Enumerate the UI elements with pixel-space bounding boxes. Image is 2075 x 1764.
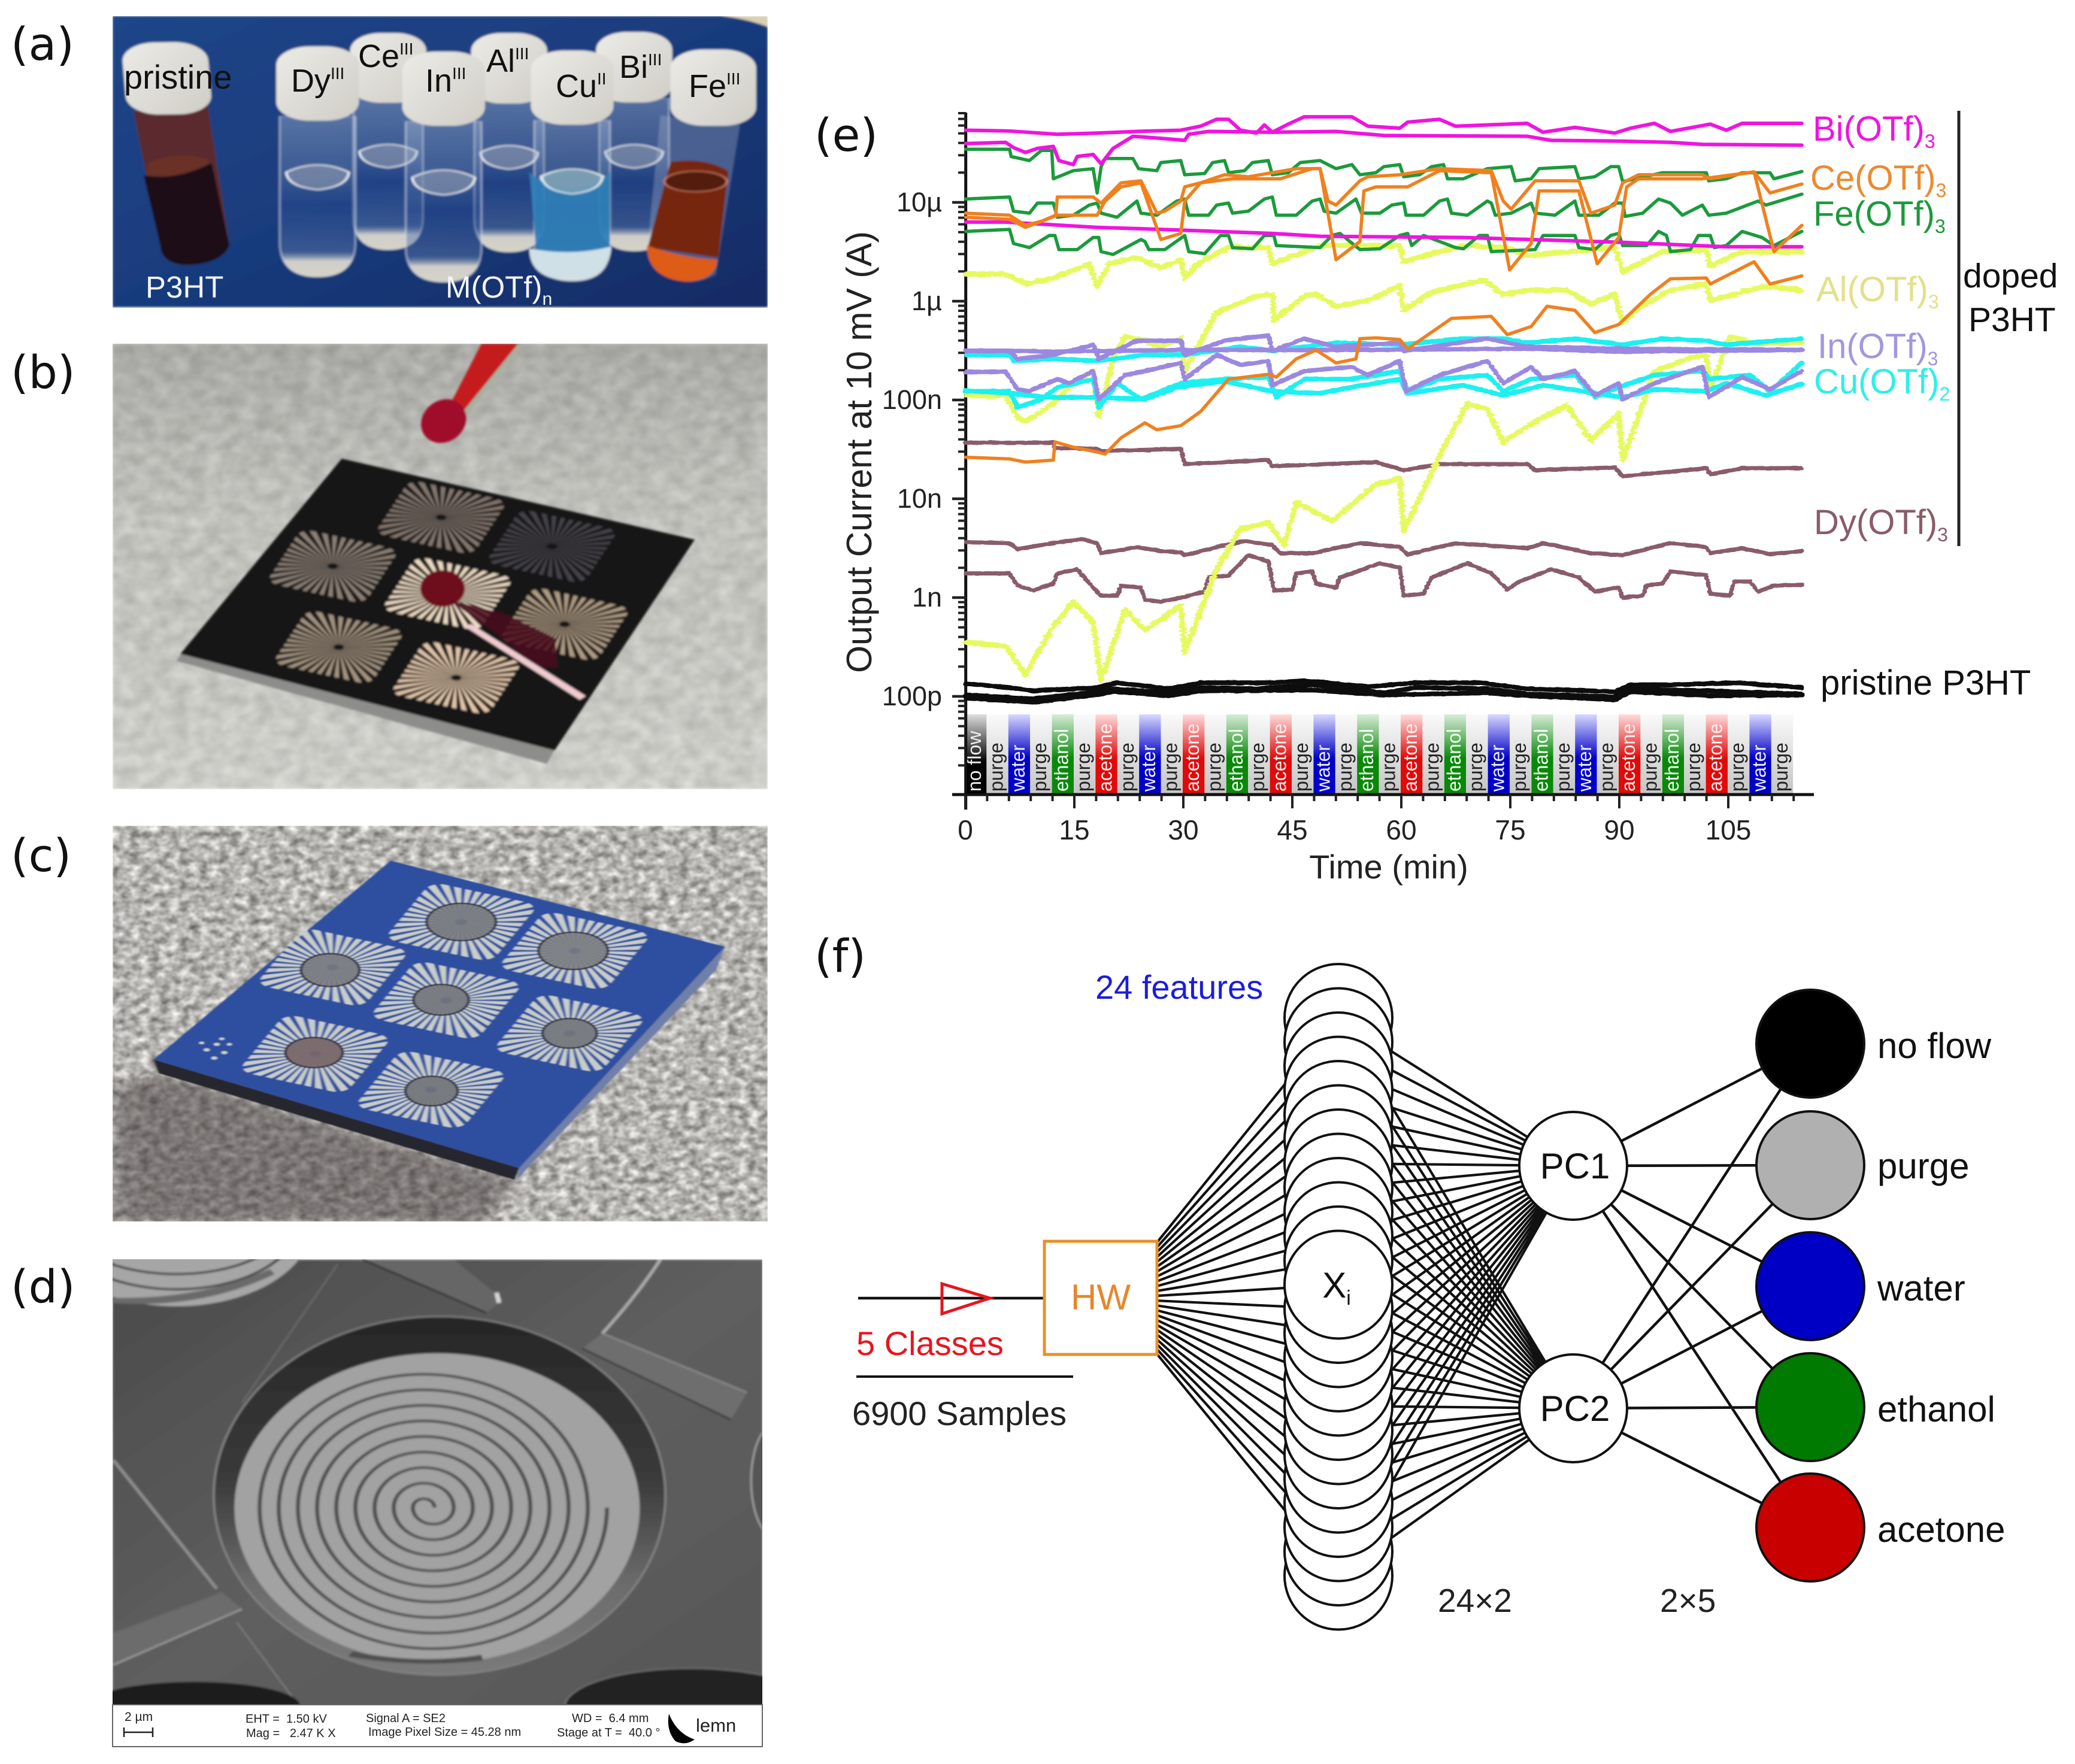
gas stimulus bars: acetone [1705, 723, 1726, 792]
gas stimulus bars: acetone [1182, 723, 1203, 792]
chart e: output current vs time [840, 110, 2058, 886]
HW box [1044, 1241, 1157, 1354]
gas stimulus bars: purge [1683, 742, 1704, 792]
y tick labels: 100n [882, 384, 942, 415]
caption: M(OTf)n: M(OTf) [446, 270, 542, 304]
edges: PCs to outputs [1573, 1044, 1810, 1527]
label: 5 Classes: 5 Classes [856, 1324, 1004, 1362]
gas stimulus bars: water [1007, 744, 1029, 792]
traces: Ce(OTf)3 [966, 169, 1802, 462]
input line [858, 1297, 1044, 1299]
panel label (b): (b) [11, 345, 75, 399]
Mag: Mag = 2.47 K X [246, 1727, 336, 1740]
panel label (f): (f) [814, 929, 866, 983]
gas stimulus bars: purge [1378, 742, 1400, 792]
vial label: Dy: Dy [291, 63, 331, 99]
traces: Dy(OTf)3 [966, 442, 1802, 602]
logo crescent [668, 1714, 695, 1743]
panel label (a): (a) [11, 17, 74, 71]
edges: features to PCs [1338, 1018, 1573, 1576]
x tick labels: 30 [1168, 814, 1199, 845]
panel b: chip with pipette drop [113, 344, 768, 789]
label: Xi: i [1346, 1287, 1351, 1310]
vial label: Bi: III [648, 50, 662, 69]
gas stimulus bars: purge [1770, 742, 1792, 792]
y tick labels: 1n [912, 582, 942, 613]
caption: M(OTf)n: n [542, 289, 552, 309]
HW label: HW [1071, 1277, 1131, 1317]
caption: P3HT: P3HT [146, 270, 223, 304]
traces: In(OTf)3 [966, 335, 1802, 399]
edges: HW to features [1157, 1018, 1338, 1576]
x tick labels: 105 [1706, 814, 1751, 845]
gas stimulus bars: purge [1203, 742, 1225, 792]
vial label: Al: Al [486, 43, 515, 79]
WD: WD = 6.4 mm [572, 1712, 649, 1725]
label: 24x2: 24×2 [1438, 1582, 1512, 1619]
bracket label: P3HT: P3HT [1968, 301, 2056, 339]
panel a: photo of vials [113, 16, 768, 309]
panel label (d): (d) [11, 1260, 75, 1313]
traces: Al(OTf)3 [966, 245, 1802, 681]
output node: water [1756, 1232, 1965, 1340]
gas stimulus bars: purge [1596, 742, 1617, 792]
panel d: SEM micrograph [40, 1141, 817, 1746]
series label: Dy(OTf)3: 3 [1937, 524, 1948, 545]
series label: Cu(OTf)2: Cu(OTf) [1814, 362, 1939, 401]
series label: Dy(OTf)3: Dy(OTf) [1814, 503, 1937, 542]
gas stimulus bars: water [1138, 744, 1159, 792]
vial label: Bi: Bi [619, 49, 648, 85]
vial label: In: In [425, 63, 452, 99]
gas stimulus bars: purge [1465, 742, 1486, 792]
gas stimulus bars [964, 714, 1793, 795]
series label: Fe(OTf)3: 3 [1935, 216, 1946, 237]
gas stimulus bars: no flow [964, 731, 985, 792]
output node: purge: purge [1877, 1146, 1969, 1186]
gas stimulus bars: ethanol [1356, 729, 1377, 792]
series label: Al(OTf)3: Al(OTf) [1816, 270, 1928, 309]
series label: Al(OTf)3: 3 [1928, 291, 1939, 313]
label: 24 features: 24 features [1095, 968, 1263, 1006]
gas stimulus bars: ethanol [1530, 729, 1552, 792]
traces: Bi(OTf)3 [966, 117, 1802, 247]
x tick labels: 90 [1604, 814, 1635, 845]
divider under classes [856, 1375, 1073, 1378]
series label: Ce(OTf)3: Ce(OTf) [1810, 159, 1935, 198]
vial label: Dy: III [331, 64, 344, 83]
node PC1: PC1 [1540, 1146, 1610, 1186]
stage: Stage at T = 40.0 ° [557, 1726, 660, 1739]
gas stimulus bars: ethanol [1661, 729, 1683, 792]
vial label: Cu: II [597, 69, 607, 88]
x tick labels: 60 [1386, 814, 1417, 845]
series label: Bi(OTf)3: Bi(OTf) [1813, 110, 1925, 148]
y tick labels: 10µ [896, 187, 942, 217]
y tick labels: 10n [897, 483, 942, 514]
scale text: 2 µm [125, 1710, 153, 1724]
y tick labels: 1µ [911, 286, 942, 316]
series label: Fe(OTf)3: Fe(OTf) [1813, 195, 1935, 234]
vial label: pristine: pristine [124, 58, 232, 96]
x tick labels: 0 [958, 814, 973, 845]
gas stimulus bars: water [1312, 744, 1334, 792]
gas stimulus bars: purge [1726, 742, 1748, 792]
gas stimulus bars: purge [1334, 742, 1356, 792]
output node: acetone: acetone [1877, 1510, 2006, 1550]
node PC2: PC2 [1540, 1389, 1610, 1429]
gas stimulus bars: purge [985, 742, 1007, 792]
output node: water: water [1877, 1268, 1965, 1308]
vial label: In: III [452, 64, 466, 83]
gas stimulus bars: purge [1247, 742, 1268, 792]
gas stimulus bars: ethanol [1051, 729, 1073, 792]
SEM info bar [113, 1705, 762, 1747]
gas stimulus bars: water [1748, 744, 1770, 792]
gas stimulus bars: acetone [1269, 723, 1291, 792]
series label: Cu(OTf)2: 2 [1939, 383, 1950, 405]
series label: Ce(OTf)3: 3 [1935, 180, 1946, 201]
series label: Bi(OTf)3: 3 [1925, 131, 1935, 152]
traces: Cu(OTf)2 [966, 339, 1802, 408]
x axis title: Time (min) [1309, 848, 1468, 886]
gas stimulus bars: purge [1508, 742, 1530, 792]
output node: purge [1756, 1111, 1969, 1219]
traces: pristine P3HT [966, 681, 1802, 702]
panel label (e): (e) [814, 108, 878, 162]
y tick labels [882, 187, 942, 711]
series label: In(OTf)3: In(OTf) [1817, 327, 1928, 366]
feature circles stack [1285, 964, 1392, 1630]
series label: In(OTf)3: 3 [1928, 348, 1938, 369]
series label: pristine P3HT: pristine P3HT [1820, 663, 2031, 702]
x tick labels: 45 [1277, 814, 1308, 845]
gas stimulus bars: acetone [1094, 723, 1116, 792]
scale bar [124, 1727, 153, 1737]
gas stimulus bars: acetone [1617, 723, 1639, 792]
x tick labels [958, 814, 1751, 845]
EHT: EHT = 1.50 kV [246, 1713, 327, 1726]
gas stimulus bars: purge [1291, 742, 1312, 792]
label: 2x5: 2×5 [1660, 1582, 1716, 1619]
gas stimulus bars: ethanol [1225, 729, 1247, 792]
output node: acetone [1756, 1474, 2006, 1581]
gas stimulus bars: purge [1116, 742, 1138, 792]
output node: ethanol [1756, 1353, 1995, 1461]
node PC2 [1519, 1354, 1627, 1462]
output node: no flow: no flow [1877, 1026, 1992, 1066]
signal: Signal A = SE2 [366, 1712, 446, 1725]
vial label: Fe: Fe [689, 68, 726, 104]
traces: Fe(OTf)3 [966, 149, 1802, 254]
label: 6900 Samples: 6900 Samples [852, 1395, 1067, 1432]
y axis title: Output Current at 10 mV (A) [840, 231, 879, 673]
bracket label: doped: doped [1963, 257, 2058, 295]
gas stimulus bars: acetone [1400, 723, 1421, 792]
node PC1 [1519, 1112, 1627, 1220]
output node: no flow [1756, 990, 1992, 1098]
x tick labels: 75 [1495, 814, 1526, 845]
gas stimulus bars: water [1574, 744, 1595, 792]
logo text: lemn [696, 1715, 736, 1736]
gas stimulus bars: purge [1421, 742, 1443, 792]
vial label: Fe: III [726, 69, 740, 88]
vial label: Cu: Cu [556, 68, 597, 104]
pixel size: Image Pixel Size = 45.28 nm [368, 1726, 521, 1739]
icon: red arrowhead [942, 1284, 990, 1314]
axes and ticks [952, 113, 1814, 810]
data traces [966, 117, 1802, 702]
gas stimulus bars: purge [1029, 742, 1050, 792]
label: Xi: X [1322, 1265, 1346, 1305]
vial label: Al: III [515, 44, 529, 63]
gas stimulus bars: ethanol [1443, 729, 1465, 792]
panel c: blue chip photo [113, 826, 768, 1222]
y tick labels: 100p [882, 681, 942, 711]
gas stimulus bars: purge [1552, 742, 1574, 792]
panel label (c): (c) [11, 829, 71, 882]
gas stimulus bars: water [1487, 744, 1508, 792]
panel f: neural network diagram [852, 964, 2006, 1630]
gas stimulus bars: purge [1073, 742, 1094, 792]
gas stimulus bars: purge [1160, 742, 1182, 792]
bracket: doped P3HT [1957, 111, 1961, 546]
vial label: Ce: Ce [358, 38, 399, 74]
gas stimulus bars: purge [1639, 742, 1661, 792]
x tick labels: 15 [1059, 814, 1090, 845]
output node: ethanol: ethanol [1877, 1389, 1995, 1429]
vial label: Ce: III [399, 40, 413, 58]
